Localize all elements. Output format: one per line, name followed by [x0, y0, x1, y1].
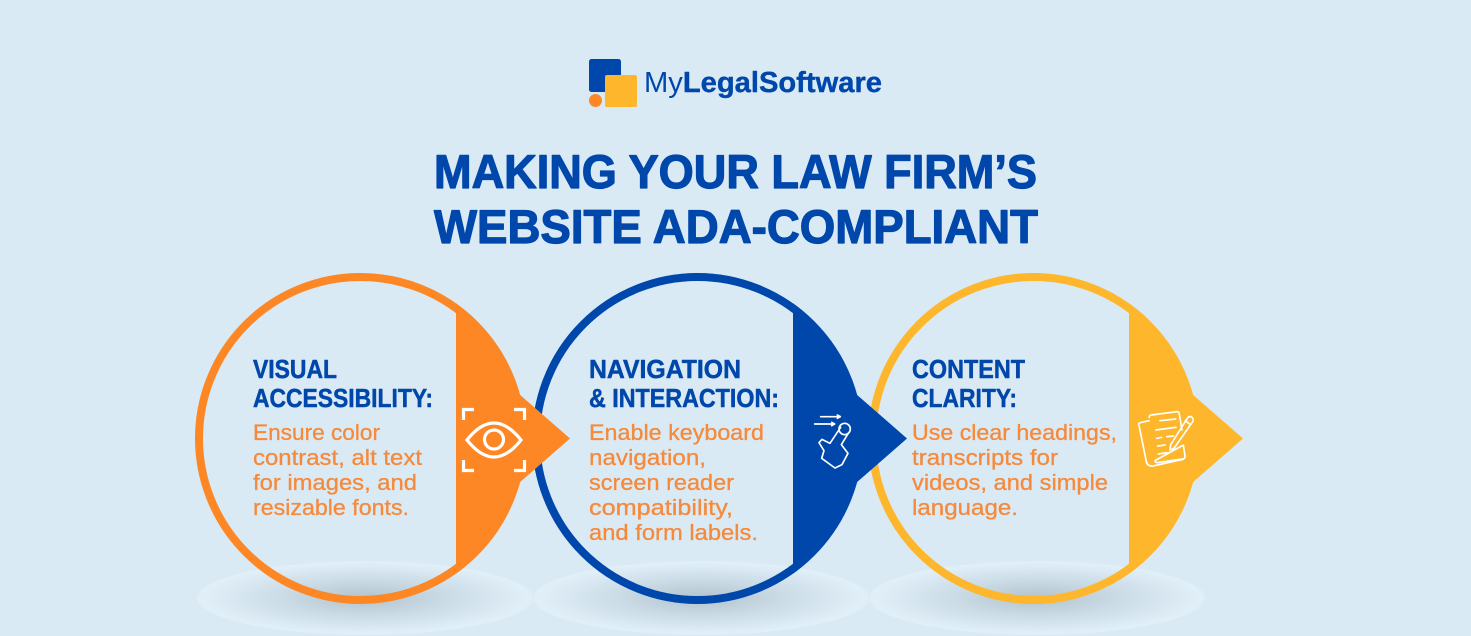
- text: navigation and interaction: [589, 356, 779, 545]
- text: visual accessibility: for images, and: [253, 470, 417, 495]
- orange arrow segment: [456, 303, 570, 574]
- text: visual accessibility: contrast, alt text: [253, 445, 423, 470]
- text: content clarity: CLARITY:: [912, 385, 1017, 413]
- blue ring: [536, 277, 859, 600]
- icon: document and pencil: [1139, 412, 1193, 466]
- yellow ring: [872, 277, 1195, 600]
- text: content clarity: [912, 356, 1117, 520]
- text: navigation and interaction: Enable keyboard: [589, 420, 764, 445]
- text: content clarity: transcripts for: [912, 445, 1059, 470]
- text: content clarity: CONTENT: [912, 356, 1025, 384]
- text: visual accessibility: [253, 356, 433, 520]
- logo mark: [589, 59, 637, 107]
- panel: navigation and interaction: [536, 277, 907, 600]
- yellow arrow segment: [1129, 303, 1243, 574]
- text: content clarity: Use clear headings,: [912, 420, 1117, 445]
- logo wordmark: MyLegalSoftware: [644, 67, 882, 99]
- text: content clarity: videos, and simple: [912, 470, 1108, 495]
- text: visual accessibility: VISUAL: [253, 356, 337, 384]
- text: visual accessibility: resizable fonts.: [253, 495, 409, 520]
- blue arrow segment: [793, 303, 907, 574]
- icon: eye in focus brackets: [464, 410, 524, 470]
- logo: [589, 59, 882, 107]
- title: MAKING YOUR LAW FIRM’S: [434, 145, 1037, 198]
- text: navigation and interaction: & INTERACTION:: [589, 385, 779, 413]
- title: [434, 145, 1038, 253]
- text: visual accessibility: ACCESSIBILITY:: [253, 385, 433, 413]
- panel: visual accessibility: [199, 277, 570, 600]
- text: navigation and interaction: navigation,: [589, 445, 706, 470]
- text: navigation and interaction: compatibility,: [589, 495, 733, 520]
- panel: content clarity: [872, 277, 1243, 600]
- text: visual accessibility: Ensure color: [253, 420, 381, 445]
- text: navigation and interaction: and form labels.: [589, 520, 758, 545]
- text: content clarity: language.: [912, 495, 1018, 520]
- orange ring: [199, 277, 522, 600]
- icon: hand pointer and arrows: [815, 415, 850, 468]
- title: WEBSITE ADA-COMPLIANT: [434, 200, 1038, 253]
- shadow: ellipse under circles: [197, 561, 1205, 635]
- text: navigation and interaction: screen reader: [589, 470, 735, 495]
- text: navigation and interaction: NAVIGATION: [589, 356, 741, 384]
